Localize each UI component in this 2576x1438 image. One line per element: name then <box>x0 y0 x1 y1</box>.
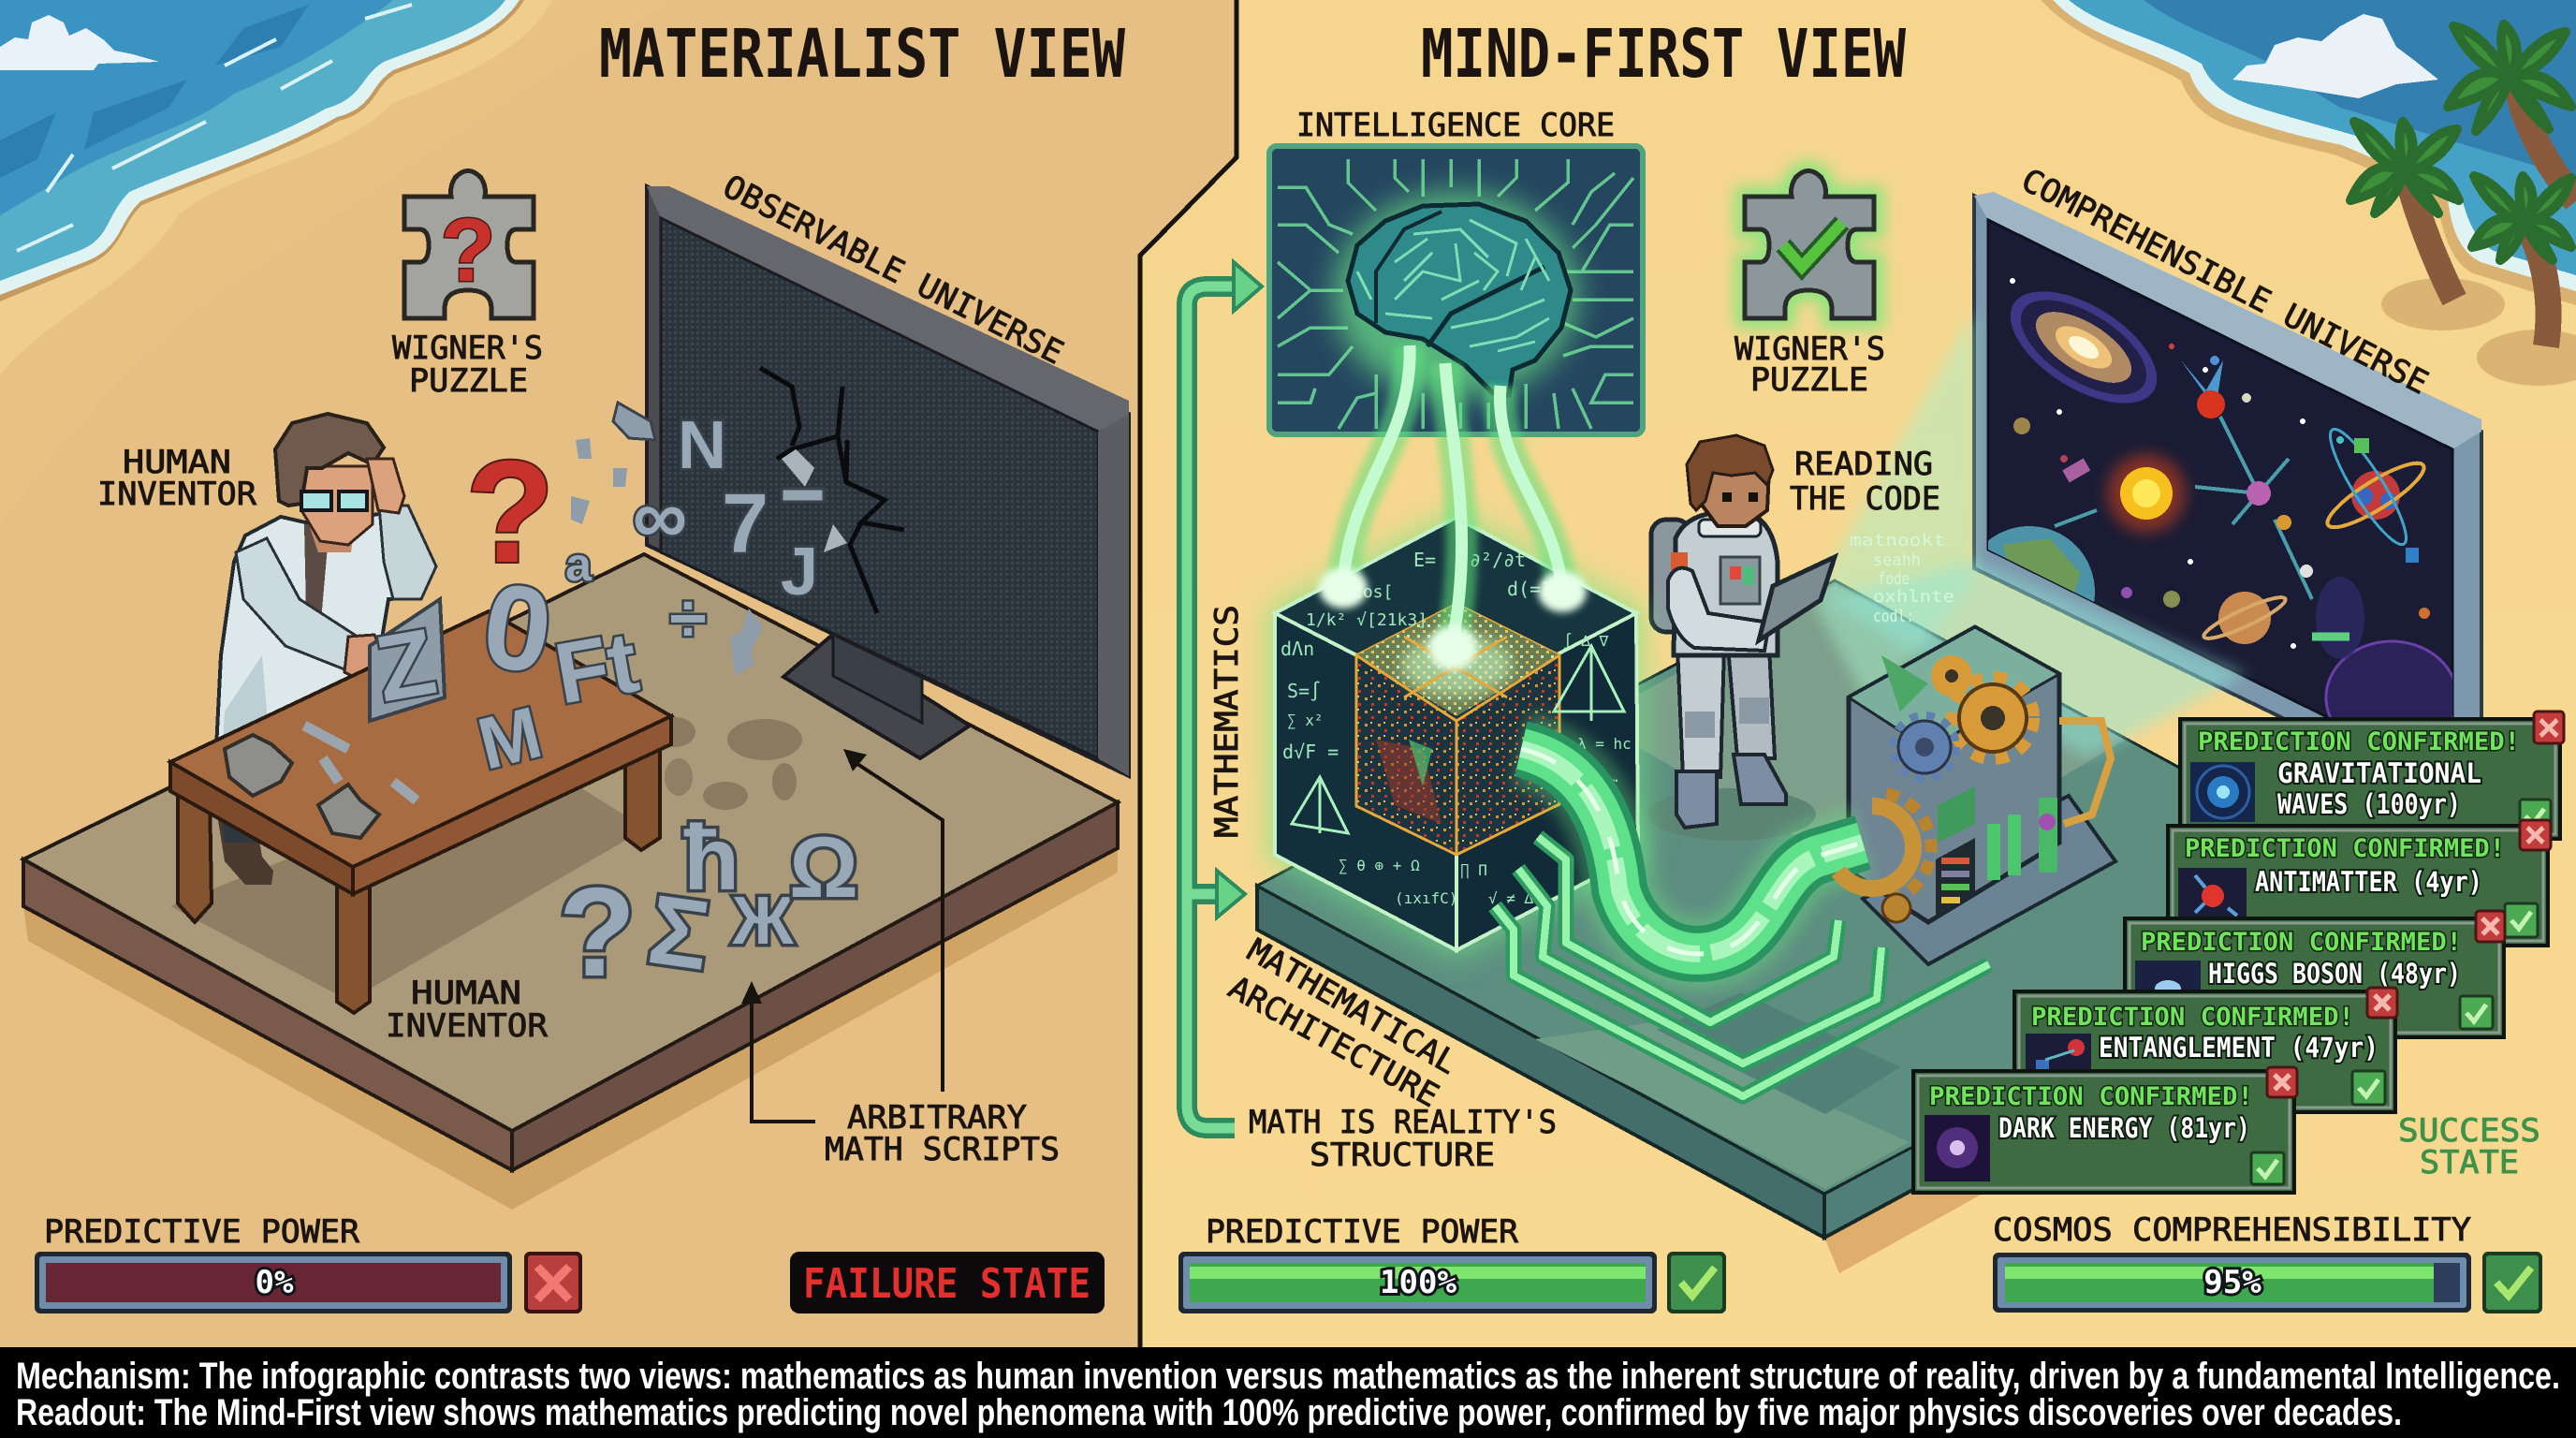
math symbols: on desk: Z <box>369 609 443 722</box>
icon: green puzzle piece with check <box>1745 170 1874 318</box>
arrow: scripts to floor symbols <box>741 981 815 1122</box>
cube math notation: (ıxıfC) <box>1395 889 1457 907</box>
icon: wooden desk <box>170 611 671 1013</box>
math symbols: on desk: a <box>565 538 593 591</box>
label: human inventor top: INVENTOR <box>97 476 257 513</box>
math symbols: on floor: Ж <box>731 884 794 959</box>
label: reading the code <box>1790 446 1940 518</box>
cube math notation: d(=1w) <box>1507 578 1574 600</box>
cube math notation: S=∫ <box>1287 680 1321 702</box>
label: intelligence core: INTELLIGENCE CORE <box>1296 107 1615 144</box>
label: wigner's puzzle left: WIGNER'S <box>392 330 543 367</box>
math symbols: on desk: Ft <box>549 614 645 723</box>
title: materialist view: MATERIALIST VIEW <box>599 15 1125 93</box>
ocean: left beach corner <box>0 0 524 301</box>
icon: check button cosmos <box>2482 1252 2542 1313</box>
math symbols: flying into screen: N <box>678 408 726 483</box>
cube math notation: ∑ x² <box>1287 712 1324 729</box>
legs <box>1677 646 1724 777</box>
cube math notation: cos[ <box>1353 582 1393 602</box>
label: comprehensible universe: COMPREHENSIBLE UNIVERSE <box>2015 161 2434 403</box>
glasses <box>301 492 331 510</box>
label: math is reality's structure: MATH IS REALITY'S <box>1249 1104 1557 1141</box>
glowing inner core <box>1356 604 1559 855</box>
label: predictive power left: PREDICTIVE POWER <box>44 1213 360 1251</box>
sun <box>2107 454 2186 533</box>
notification: gravitational waves <box>2180 712 2564 839</box>
label: wigner's puzzle right <box>1734 330 1885 399</box>
cube math notation <box>1281 549 1632 907</box>
math symbols: flying into screen: J <box>781 535 818 609</box>
label: cosmos comprehensibility: COSMOS COMPREHENSIBILITY <box>1993 1211 2471 1249</box>
notification: entanglement <box>2014 988 2397 1112</box>
progress bar: cosmos comprehensibility 95%: 95% <box>2203 1264 2261 1301</box>
icon: wigner's puzzle piece with question mark <box>404 170 534 318</box>
label: human inventor top <box>97 444 257 513</box>
cube math notation: dΛn <box>1281 638 1314 660</box>
monitor: comprehensible universe cosmic screen <box>1972 192 2483 717</box>
text: projected code: codl: <box>1873 607 1914 626</box>
puzzle fragments on desk <box>225 735 379 838</box>
notification: antimatter: ANTIMATTER (4yr) <box>2255 866 2482 898</box>
notification: higgs boson: PREDICTION CONFIRMED! <box>2141 928 2462 957</box>
platform: materialist isometric floor <box>23 554 1118 1210</box>
notification: higgs boson: HIGGS BOSON (48yr) <box>2208 958 2461 990</box>
label: mathematical architecture: MATHEMATICAL <box>1241 932 1464 1082</box>
collar <box>1699 520 1761 536</box>
panel: mind-first view background <box>1140 0 2576 1347</box>
cube math notation: ∂ ∮ π… <box>1565 768 1617 785</box>
label: reading the code: READING <box>1794 446 1933 483</box>
label: success state <box>2398 1112 2540 1181</box>
label: predictive power right: PREDICTIVE POWER <box>1206 1213 1519 1251</box>
label: math is reality's structure: STRUCTURE <box>1310 1137 1495 1174</box>
notification: entanglement: PREDICTION CONFIRMED! <box>2031 1003 2354 1032</box>
progress bar: predictive power 100%: 100% <box>1380 1264 1456 1301</box>
label: arbitrary math scripts: ARBITRARY <box>847 1099 1027 1137</box>
notification: antimatter <box>2168 820 2551 946</box>
label: arbitrary math scripts <box>825 1099 1060 1168</box>
cube math notation: √ ≠ ∆ <box>1488 889 1534 907</box>
earth <box>1988 526 2095 602</box>
label: math is reality's structure <box>1249 1104 1557 1174</box>
pipes: thin data conduits <box>1495 837 1989 1096</box>
saturn <box>2218 592 2271 644</box>
text: projected code <box>1850 531 1954 626</box>
tablet <box>1759 557 1835 640</box>
icon: gear machine <box>1849 627 2115 964</box>
panel: materialist view background <box>0 0 1237 1347</box>
notification: dark energy <box>1913 1067 2297 1193</box>
atom <box>2351 471 2400 520</box>
label: wigner's puzzle left <box>392 330 543 400</box>
notification: gravitational waves: GRAVITATIONAL <box>2277 757 2481 789</box>
text: projected code: matnookt <box>1850 531 1945 550</box>
arrow: scripts to monitor stand <box>843 749 943 1092</box>
label: reading the code: THE CODE <box>1790 480 1940 518</box>
icon: right cloud <box>2232 14 2438 98</box>
crack lines on screen <box>760 368 904 613</box>
icon: left cloud <box>0 15 159 70</box>
panel: intelligence core <box>1269 107 1643 434</box>
title: mind-first view: MIND-FIRST VIEW <box>1421 15 1906 93</box>
math symbols: on floor: Ω <box>789 820 858 916</box>
progress bar: predictive power 0%: 0% <box>256 1264 294 1301</box>
math symbols: on desk: M <box>470 691 549 785</box>
panel divider <box>1140 0 1237 1347</box>
math symbols: on desk <box>369 538 754 785</box>
math symbols: flying into screen: ∞ <box>633 475 687 560</box>
backpack <box>1651 520 1690 632</box>
label: observable universe: OBSERVABLE UNIVERSE <box>717 168 1069 373</box>
arm <box>1668 568 1769 651</box>
arrow: mathematics bracket <box>1187 262 1262 1128</box>
icon: scientist human inventor <box>215 414 436 885</box>
caption bar <box>0 1347 2576 1438</box>
icon: wigner's puzzle piece with question mark: ? <box>441 200 495 301</box>
icon: ring gear at pipe end <box>1814 785 1939 922</box>
icon: palm trees <box>2350 24 2576 386</box>
light projection: tablet to monitor <box>1811 309 2247 758</box>
text: projected code: seahh <box>1873 550 1921 570</box>
torso <box>1674 513 1778 655</box>
notification: gravitational waves: WAVES (100yr) <box>2277 788 2461 820</box>
notification: dark energy: DARK ENERGY (81yr) <box>1998 1112 2250 1144</box>
platform: mind-first isometric floor <box>1257 580 2402 1273</box>
cube math notation: ∫ ∆ ∇ <box>1563 632 1609 650</box>
icon: red x button <box>524 1252 582 1313</box>
label: success state: SUCCESS <box>2398 1112 2540 1150</box>
label: human inventor floor <box>386 975 549 1045</box>
label: wigner's puzzle left: PUZZLE <box>409 362 528 400</box>
notification: entanglement: ENTANGLEMENT (47yr) <box>2099 1032 2378 1064</box>
cube math notation: ∑ θ ⊕ + Ω <box>1339 857 1420 874</box>
notification: antimatter: PREDICTION CONFIRMED! <box>2185 834 2505 863</box>
cube math notation: ∂²/∂t <box>1470 549 1526 571</box>
lab coat body <box>215 513 432 777</box>
icon: brain <box>1334 192 1577 398</box>
hair <box>275 414 384 506</box>
notification: gravitational waves: PREDICTION CONFIRMED! <box>2198 727 2520 756</box>
pipe: main energy stream <box>1521 749 1863 954</box>
notification: dark energy: PREDICTION CONFIRMED! <box>1929 1082 2253 1111</box>
math symbols: on desk: 0 <box>476 558 560 699</box>
notification: higgs boson <box>2125 911 2505 1037</box>
badge: failure state: FAILURE STATE <box>803 1260 1090 1308</box>
label: wigner's puzzle right: PUZZLE <box>1750 361 1868 399</box>
particle tracks <box>2055 417 2312 599</box>
cube math notation: 1/k² √[21k3] <box>1306 610 1427 630</box>
icon: mathematics cube <box>1275 518 1638 950</box>
label: mathematical architecture: ARCHITECTURE <box>1222 969 1445 1115</box>
monitor: observable universe cracked screen <box>647 186 1129 776</box>
label: wigner's puzzle right: WIGNER'S <box>1734 330 1885 368</box>
icon: big red question mark: ? <box>466 431 554 593</box>
head <box>1694 468 1769 526</box>
math symbols: on floor <box>559 806 858 1003</box>
progress bar: predictive power 100% <box>1178 1252 1657 1313</box>
text: projected code: fode <box>1878 569 1910 589</box>
arm to desk <box>236 538 360 669</box>
math symbols: on floor: ħ <box>683 806 739 909</box>
progress bar: predictive power 0% <box>35 1252 512 1313</box>
beams: intelligence to cube <box>1319 345 1587 670</box>
label: human inventor floor: INVENTOR <box>386 1007 549 1045</box>
icon: astronaut reading tablet <box>1647 435 1835 841</box>
icon: check button predictive <box>1667 1252 1726 1313</box>
text: projected code: oxhlnte <box>1873 587 1954 607</box>
raised arm <box>379 506 436 599</box>
label: success state: STATE <box>2420 1144 2519 1181</box>
label: arbitrary math scripts: MATH SCRIPTS <box>825 1131 1060 1168</box>
math symbols: on floor: Σ <box>642 874 716 991</box>
math symbols: on floor: ? <box>559 861 636 1003</box>
nebula <box>2325 640 2452 717</box>
math symbols: on desk: ÷ <box>669 581 707 656</box>
label: human inventor top: HUMAN <box>123 444 231 481</box>
galaxy <box>2011 292 2157 403</box>
progress bar: cosmos comprehensibility 95% <box>1993 1253 2471 1313</box>
math symbols: flying into screen: 7 <box>722 477 768 571</box>
cube math notation: λ = hc <box>1577 735 1632 753</box>
label: mathematics vertical: MATHEMATICS <box>1208 605 1246 838</box>
ocean: right beach corner <box>2041 0 2576 305</box>
cube math notation: d√F = <box>1282 741 1339 763</box>
cube math notation: E= <box>1413 549 1436 571</box>
cube math notation: ∏ Π <box>1460 861 1487 879</box>
label: human inventor floor: HUMAN <box>411 975 521 1012</box>
neck and face <box>309 515 356 552</box>
math symbols: flying into screen <box>571 403 847 655</box>
